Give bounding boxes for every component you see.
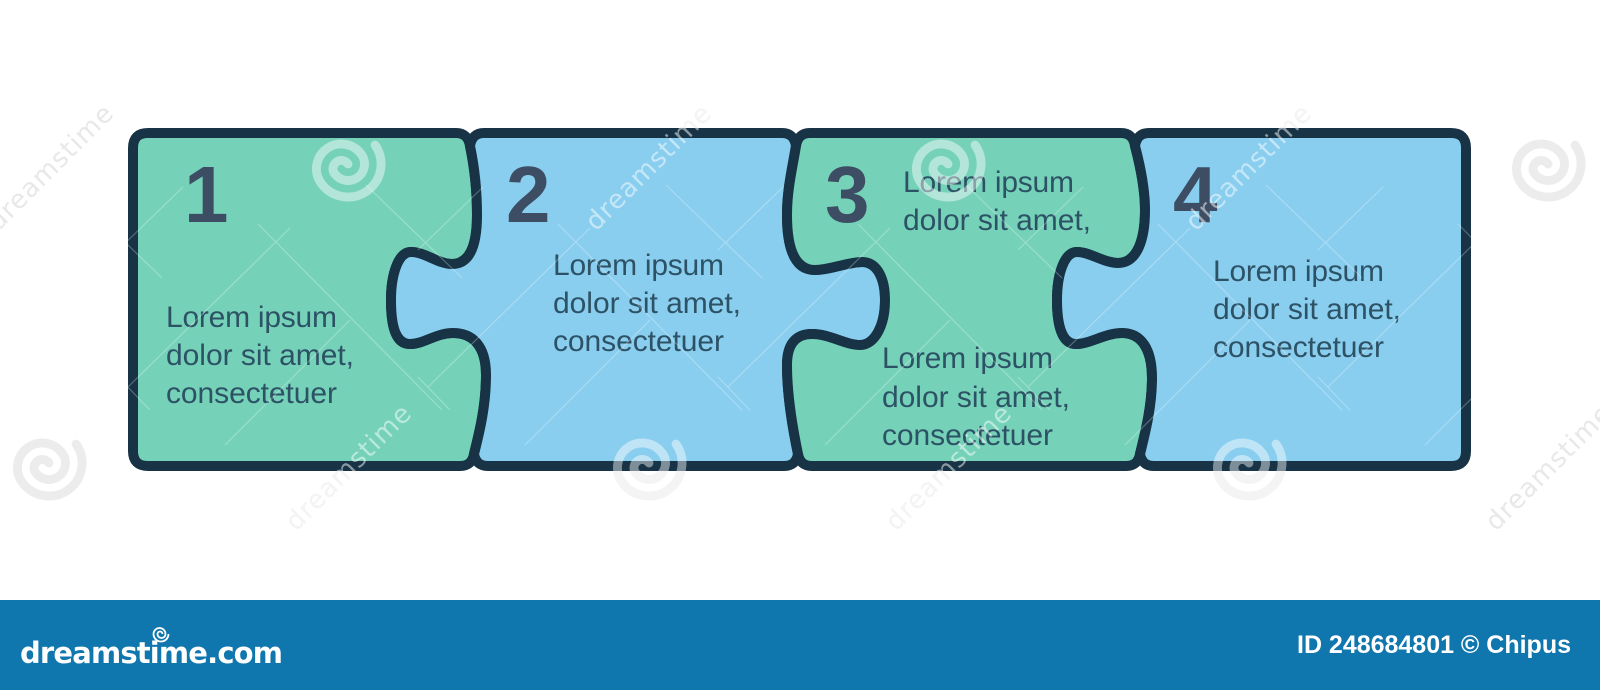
faint background watermark: spirals and wordmarks on white: [0, 99, 1600, 537]
text block piece 3 lower: consectetuer: [882, 419, 1053, 452]
watermark overlay: lines, spirals, wordmarks: dreamstime: [280, 399, 418, 537]
text block piece 3 lower: Lorem ipsum: [882, 342, 1053, 375]
text block piece 2: Lorem ipsum: [553, 249, 724, 282]
puzzle strip: [133, 133, 1466, 466]
puzzle piece 4: [1057, 133, 1466, 466]
number 4: 4: [1173, 150, 1218, 239]
watermark overlay: lines, spirals, wordmarks: [66, 99, 1600, 537]
faint background watermark: spirals and wordmarks on white: dreamstime: [280, 399, 418, 537]
image id and credit: ID 248684801 © Chipus: [1297, 631, 1571, 659]
text block piece 4: consectetuer: [1213, 331, 1384, 364]
number 3: 3: [825, 150, 870, 239]
watermark overlay: lines, spirals, wordmarks: dreamstime: [1180, 99, 1318, 237]
text block piece 4: dolor sit amet,: [1213, 293, 1401, 326]
text block piece 1: Lorem ipsum: [166, 301, 337, 334]
faint background watermark: spirals and wordmarks on white: dreamstime: [1180, 99, 1318, 237]
text block piece 3 lower: dolor sit amet,: [882, 381, 1070, 414]
watermark overlay: lines, spirals, wordmarks: dreamstime: [580, 99, 718, 237]
faint background watermark: spirals and wordmarks on white: dreamstime: [880, 399, 1018, 537]
text block piece 4: Lorem ipsum: [1213, 255, 1384, 288]
text block piece 1: dolor sit amet,: [166, 339, 354, 372]
footer logo wordmark: dreamstime.com: [20, 636, 283, 670]
footer logo spiral: [154, 628, 168, 642]
text block piece 2: dolor sit amet,: [553, 287, 741, 320]
number 2: 2: [506, 150, 550, 239]
watermark overlay: lines, spirals, wordmarks: dreamstime: [880, 399, 1018, 537]
puzzle piece 1: [133, 133, 486, 466]
text block piece 1: consectetuer: [166, 377, 337, 410]
puzzle piece 2: [391, 133, 885, 466]
puzzle piece 3: [787, 133, 1152, 466]
number 1: 1: [184, 150, 228, 239]
text block piece 3 upper: Lorem ipsum: [903, 166, 1074, 199]
faint background watermark: spirals and wordmarks on white: dreamstime: [580, 99, 718, 237]
text block piece 3 upper: dolor sit amet,: [903, 204, 1091, 237]
text block piece 2: consectetuer: [553, 325, 724, 358]
footer bar: [0, 600, 1600, 690]
